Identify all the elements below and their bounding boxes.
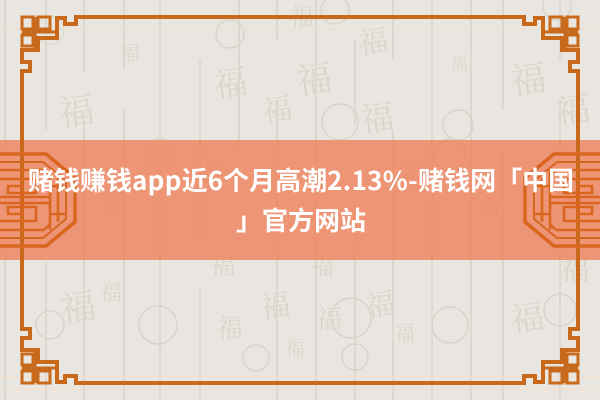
medallion: left octagon lattice (0, 154, 75, 246)
background: paper with faint fu characters: 福 (293, 50, 335, 105)
medallion: right octagon lattice (525, 154, 600, 246)
background: paper with faint fu characters: 福 (316, 299, 342, 336)
background: paper with faint fu characters: 福 (395, 317, 415, 346)
background: paper with faint fu characters: 福 (200, 149, 228, 189)
frame: bottom-right corner (300, 200, 578, 383)
background: paper with faint fu characters: 福 (100, 181, 126, 218)
background: paper with faint fu characters: 福 (100, 276, 122, 307)
background: paper with faint fu characters: 福 (480, 186, 506, 223)
background: paper with faint fu characters: 福 (300, 166, 326, 203)
background: paper with faint fu characters: 福 (362, 278, 398, 326)
background: paper with faint fu characters: 福 (57, 278, 99, 333)
background: paper with faint fu characters: 福 (450, 50, 468, 76)
background: paper with faint fu characters: 福 (285, 332, 305, 361)
frame: top-right corner (300, 17, 578, 200)
background: paper with faint fu characters: 福 (217, 308, 243, 345)
background: paper with faint fu characters: 福 (560, 245, 590, 289)
frame: top-left corner (22, 17, 300, 200)
title: 赌钱赚钱app近6个月高潮2.13%-赌钱网「中国 (28, 161, 574, 198)
background: paper with faint fu characters: 福 (210, 54, 250, 107)
background: paper with faint fu characters: 福 (257, 279, 293, 327)
background: paper with faint fu characters: 福 (552, 81, 593, 134)
frame: bottom-left corner (22, 200, 300, 383)
background: paper with faint fu characters: 福 (120, 37, 140, 66)
background: paper with faint fu characters: 福 (259, 83, 295, 131)
background: paper with faint fu characters: 福 (210, 245, 236, 282)
background: paper with faint fu characters: 福 (507, 50, 549, 105)
background: paper with faint fu characters: 福 (55, 82, 97, 137)
background: paper with faint fu characters: 福 (310, 246, 334, 281)
background: paper with faint fu characters: 福 (356, 89, 397, 142)
title (28, 161, 574, 238)
banner band (0, 140, 600, 260)
background: paper with faint fu characters: 福 (507, 289, 547, 342)
background: paper with faint fu characters: 福 (400, 154, 428, 194)
background: paper with faint fu characters: 福 (355, 15, 391, 63)
title: 」官方网站 (236, 201, 366, 238)
